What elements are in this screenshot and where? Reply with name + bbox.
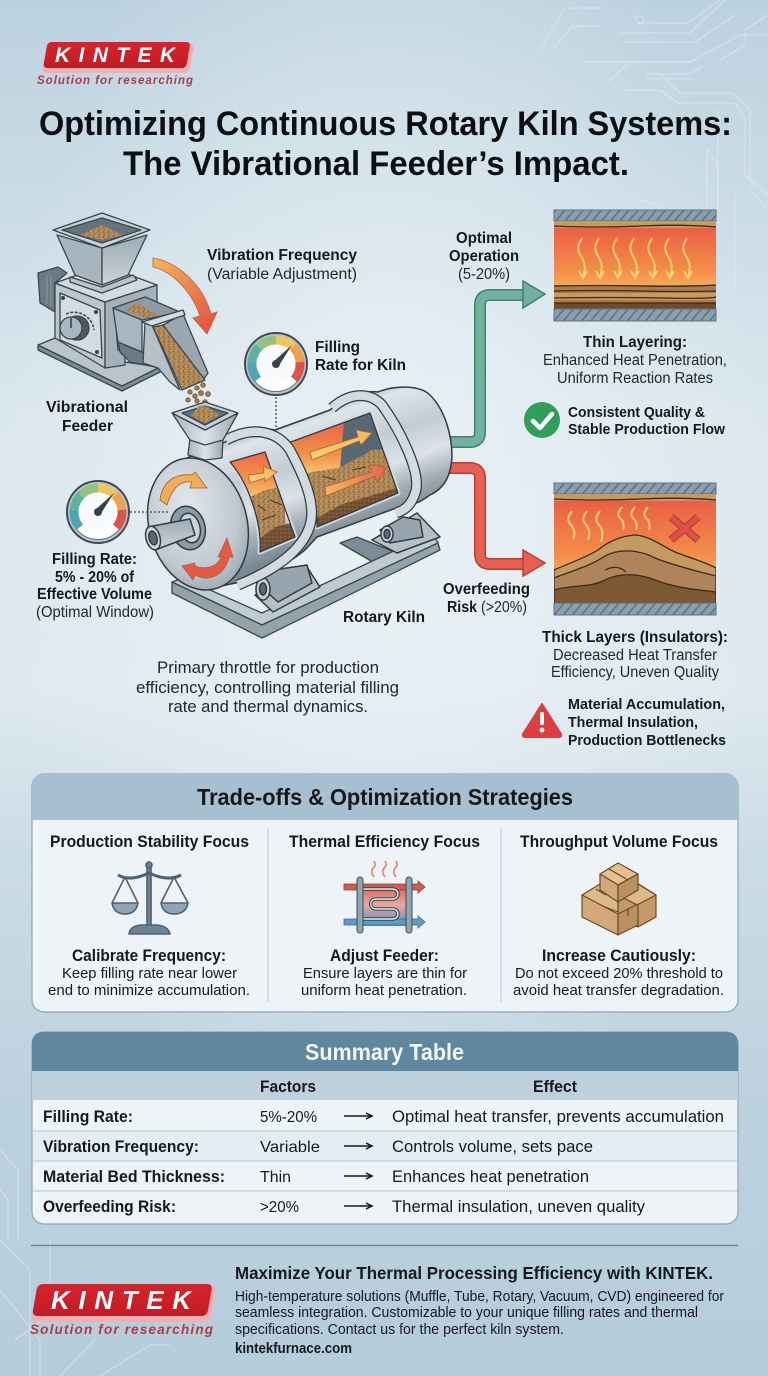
label: optimal operation [449, 230, 519, 283]
row: overfeeding risk: Thermal insulation, uneven quality [392, 1198, 646, 1216]
arrow: vibration frequency [153, 258, 217, 334]
label: optimal operation: Optimal [456, 230, 512, 247]
heat penetration squiggles [578, 238, 692, 278]
title [39, 105, 732, 183]
label: thin layering: Enhanced Heat Penetration, [543, 352, 727, 369]
column: throughput volume: Do not exceed 20% threshold to [515, 965, 723, 982]
description text: rate and thermal dynamics. [168, 698, 368, 716]
panel: thick layers diagram [554, 483, 716, 615]
window: material and hot gas, front [229, 451, 298, 554]
title: The Vibrational Feeder’s Impact. [123, 145, 629, 183]
logo: top KINTEK: KINTEK [55, 44, 177, 67]
column headers: Factors [260, 1078, 316, 1096]
label: overfeeding risk: (>20%) [481, 599, 527, 616]
label: vibration frequency [207, 247, 357, 283]
rotation arrows [160, 472, 233, 580]
label: thick layers [542, 629, 728, 681]
label: filling rate window: (Optimal Window) [36, 604, 154, 621]
callout: consistent quality: Consistent Quality & [568, 404, 705, 421]
description text: efficiency, controlling material filling [136, 679, 399, 697]
column: production stability: end to minimize accumulation. [48, 982, 250, 999]
row: filling rate: Optimal heat transfer, prevents accumulation [392, 1108, 724, 1126]
kiln hub and axle [143, 502, 210, 554]
column headers [32, 1071, 738, 1100]
logo: footer KINTEK: Solution for researching [30, 1322, 214, 1337]
kiln stand [172, 533, 440, 638]
column: throughput volume: Throughput Volume Focus [520, 832, 718, 851]
label: vibration frequency: Vibration Frequency [207, 247, 357, 264]
row: filling rate: 5%-20% [260, 1109, 317, 1126]
icon: stacked boxes [582, 863, 656, 935]
row: material bed thickness: Material Bed Thickness: [43, 1168, 225, 1186]
panel header [32, 774, 738, 820]
column: thermal efficiency: uniform heat penetration. [301, 982, 467, 999]
row: material bed thickness: Enhances heat penetration [392, 1168, 589, 1186]
label: filling rate window: Effective Volume [37, 586, 152, 603]
label: rotary kiln: Rotary Kiln [343, 609, 425, 626]
panel: trade-offs and optimization strategies [32, 774, 738, 1012]
column: throughput volume: avoid heat transfer degradation. [513, 982, 724, 999]
kiln ring front [226, 432, 312, 585]
footer text: Maximize Your Thermal Processing Efficiency with KINTEK. [235, 1263, 713, 1283]
row: overfeeding risk: Overfeeding Risk: [43, 1198, 176, 1216]
label: optimal operation: Operation [449, 248, 519, 265]
label: filling rate for kiln: Rate for Kiln [315, 357, 406, 374]
description text [136, 659, 399, 716]
label: overfeeding risk: Risk [447, 599, 477, 616]
icon: check [524, 402, 560, 438]
label: vibration frequency: (Variable Adjustment) [207, 266, 357, 283]
row: vibration frequency [43, 1138, 593, 1156]
label: thin layering: Thin Layering: [583, 334, 687, 351]
column: thermal efficiency: Adjust Feeder: [330, 947, 439, 965]
description text: Primary throttle for production [157, 659, 379, 677]
logo: footer KINTEK: KINTEK [51, 1285, 193, 1315]
column: production stability [48, 832, 250, 999]
column: throughput volume [513, 832, 724, 999]
falling granules [186, 383, 210, 408]
row: material bed thickness [43, 1168, 589, 1186]
footer text: seamless integration. Customizable to your unique filling rates and thermal [235, 1304, 698, 1321]
label: optimal operation: (5-20%) [458, 266, 510, 283]
footer text: kintekfurnace.com [235, 1341, 352, 1357]
callout: bottleneck warning: Production Bottlenecks [568, 732, 726, 749]
callout: bottleneck warning: Thermal Insulation, [568, 714, 698, 731]
label: vibrational feeder: Vibrational [46, 399, 128, 416]
column: thermal efficiency: Thermal Efficiency Focus [289, 832, 480, 851]
arrow: optimal path [445, 281, 545, 442]
logo: top KINTEK: Solution for researching [37, 75, 193, 87]
row: overfeeding risk: >20% [260, 1199, 299, 1216]
roller supports [255, 513, 440, 612]
window: material and hot gas, rear [285, 410, 405, 530]
heat squiggles blocked [568, 507, 650, 542]
row: filling rate [43, 1108, 724, 1126]
label: filling rate window [36, 551, 154, 621]
flow arrows in windows [248, 430, 387, 496]
panel: thin layering diagram [554, 210, 716, 321]
callout: bottleneck warning: Material Accumulation, [568, 696, 725, 713]
row: filling rate: Filling Rate: [43, 1108, 133, 1126]
title: Optimizing Continuous Rotary Kiln Systems: [39, 105, 732, 143]
arrow: overfeeding path [445, 468, 545, 576]
label: thick layers: Efficiency, Uneven Quality [551, 664, 719, 681]
label: thick layers: Thick Layers (Insulators): [542, 629, 728, 646]
column: production stability: Production Stability Focus [50, 832, 249, 851]
icon: vibrational feeder [38, 213, 208, 391]
rotary kiln [133, 387, 452, 612]
material heap [554, 535, 716, 603]
label: overfeeding risk [443, 581, 530, 616]
column: production stability: Keep filling rate near lower [62, 965, 237, 982]
logo: top KINTEK [37, 42, 194, 87]
icon: red x [671, 517, 698, 540]
column: throughput volume: Increase Cautiously: [542, 947, 696, 965]
gauge: filling rate for kiln [245, 333, 307, 427]
label: thick layers: Decreased Heat Transfer [553, 647, 717, 664]
row: overfeeding risk [43, 1198, 646, 1216]
callout: consistent quality [524, 402, 725, 438]
column: production stability: Calibrate Frequency: [72, 947, 226, 965]
label: vibrational feeder [46, 399, 128, 435]
footer text: specifications. Contact us for the perfect kiln system. [235, 1321, 564, 1338]
footer text [235, 1263, 724, 1357]
logo: footer KINTEK [30, 1284, 216, 1337]
kiln ring rear [332, 396, 417, 513]
label: filling rate window: 5% - 20% of [55, 569, 135, 586]
label: thin layering [543, 334, 727, 387]
kiln front end cap [133, 447, 263, 601]
table header [32, 1032, 738, 1071]
table title: Summary Table [305, 1039, 464, 1065]
label: vibrational feeder: Feeder [62, 418, 113, 435]
label: overfeeding risk: Overfeeding [443, 581, 530, 598]
callout: bottleneck warning [523, 696, 726, 749]
label: filling rate window: Filling Rate: [52, 551, 137, 568]
icon: heat exchanger [344, 861, 425, 933]
heading: Trade-offs & Optimization Strategies [197, 784, 573, 810]
icon: balance scales [112, 862, 188, 934]
icon: warning triangle [523, 704, 561, 737]
panel: summary table [32, 1032, 738, 1224]
row: material bed thickness: Thin [260, 1169, 291, 1186]
column: thermal efficiency [289, 832, 480, 999]
callout: consistent quality: Stable Production Flow [568, 421, 725, 438]
row: vibration frequency: Variable [260, 1139, 320, 1156]
label: filling rate for kiln [315, 339, 406, 374]
row: vibration frequency: Vibration Frequency: [43, 1138, 199, 1156]
feed funnel [172, 402, 238, 460]
gauge: filling rate window [67, 481, 168, 543]
row: vibration frequency: Controls volume, sets pace [392, 1138, 593, 1156]
label: filling rate for kiln: Filling [315, 339, 360, 356]
footer text: High-temperature solutions (Muffle, Tube, Rotary, Vacuum, CVD) engineered for [235, 1288, 724, 1305]
column: thermal efficiency: Ensure layers are thin for [303, 965, 467, 982]
label: thin layering: Uniform Reaction Rates [557, 370, 713, 387]
kiln barrel [187, 387, 452, 590]
column headers: Effect [533, 1078, 577, 1096]
